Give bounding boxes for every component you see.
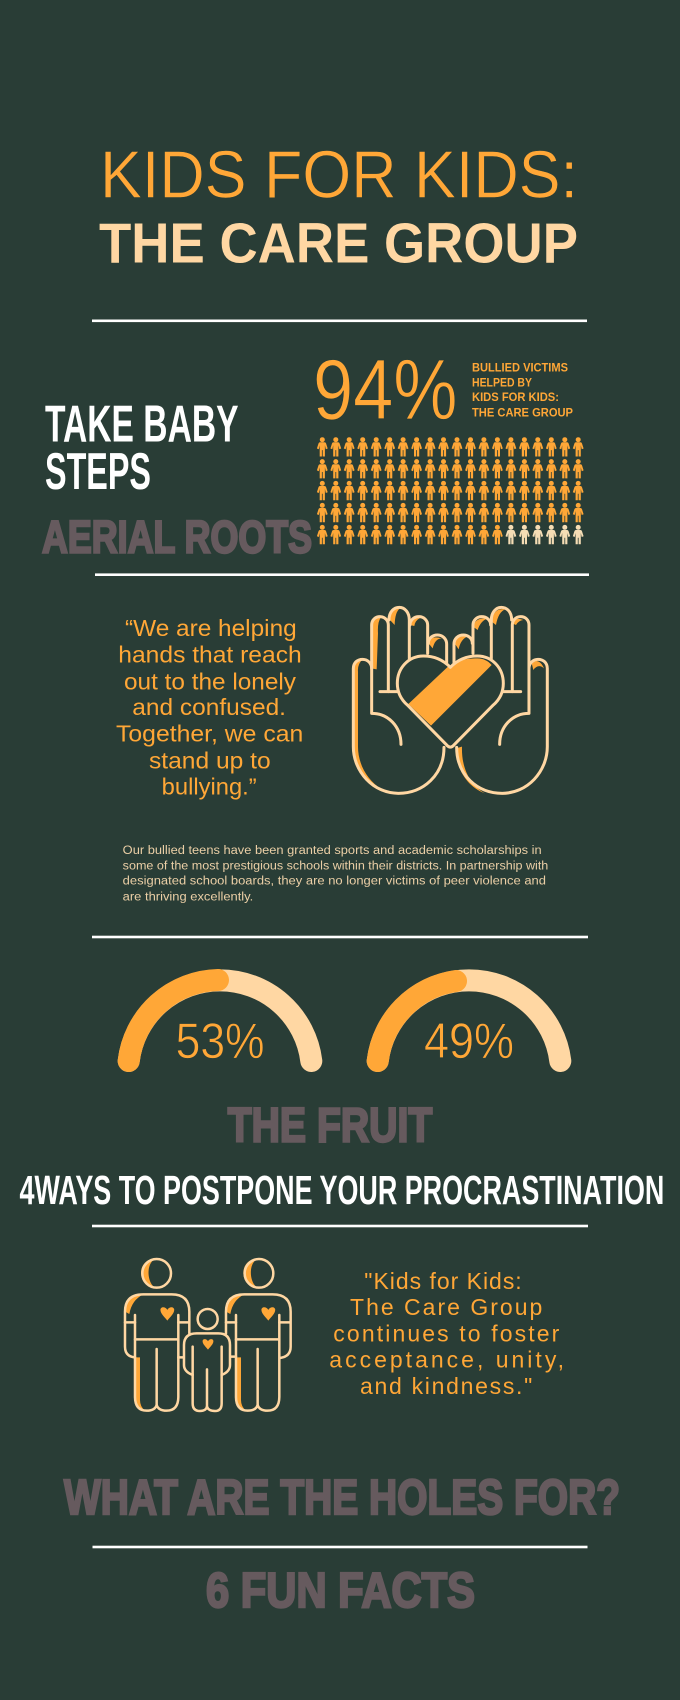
- title: KIDS FOR KIDS:: [100, 138, 578, 212]
- heart: [397, 656, 503, 747]
- quote: helping hands: and confused.: [132, 694, 286, 720]
- orange hand shading: [353, 608, 544, 793]
- title: [99, 138, 578, 276]
- heading: take baby steps: [45, 396, 238, 501]
- orange family shading: [125, 1258, 259, 1411]
- quote: care group continues: [329, 1268, 564, 1399]
- quote: care group continues: The Care Group: [350, 1294, 542, 1320]
- stat: 94 percent: 94%: [313, 343, 458, 438]
- title: THE CARE GROUP: [99, 212, 578, 276]
- text block: scholarships paragraph: some of the most prestigious schools within their districts. In partnership with: [123, 860, 548, 872]
- stat: 94 percent: BULLIED VICTIMS: [472, 363, 568, 375]
- quote: care group continues: "Kids for Kids:: [364, 1268, 522, 1294]
- quote: helping hands: “We are helping: [125, 615, 297, 641]
- heading: take baby steps: TAKE BABY: [45, 396, 238, 454]
- stat: 94 percent: [313, 343, 573, 438]
- text block: scholarships paragraph: Our bullied teens have been granted sports and academic scholarships in: [123, 845, 542, 857]
- family hearts: [160, 1307, 275, 1350]
- gauge: 49 percent: [378, 980, 560, 1069]
- stat: 94 percent: HELPED BY: [472, 378, 532, 390]
- heading: take baby steps: STEPS: [45, 443, 151, 501]
- quote: helping hands: out to the lonely: [124, 668, 297, 694]
- text block: scholarships paragraph: [123, 845, 548, 904]
- quote: care group continues: and kindness.": [360, 1373, 532, 1399]
- quote: helping hands: stand up to: [149, 747, 271, 773]
- child: [184, 1309, 230, 1411]
- icon: hands holding heart: [353, 607, 547, 793]
- quote: helping hands: Together, we can: [116, 721, 303, 747]
- heading: aerial roots: AERIAL ROOTS: [42, 512, 312, 563]
- icon: family: [125, 1258, 291, 1411]
- stat: 94 percent: KIDS FOR KIDS:: [472, 392, 559, 404]
- left hand outline: [353, 607, 447, 793]
- left adult: [125, 1259, 189, 1411]
- quote: helping hands: hands that reach: [118, 642, 302, 668]
- heading: 6 fun facts: 6 FUN FACTS: [206, 1564, 475, 1618]
- gauge: 49 percent: 49%: [424, 1013, 514, 1069]
- text block: scholarships paragraph: designated school boards, they are no longer victims of peer violence and: [123, 875, 546, 887]
- quote: care group continues: continues to foster: [333, 1321, 560, 1347]
- stat: 94 percent: THE CARE GROUP: [472, 408, 573, 420]
- quote: helping hands: [116, 615, 303, 799]
- text block: scholarships paragraph: are thriving excellently.: [123, 892, 253, 904]
- right adult: [226, 1259, 291, 1411]
- gauge: 53 percent: 53%: [176, 1013, 265, 1069]
- quote: helping hands: bullying.”: [162, 773, 257, 799]
- pictogram: 100 people, 94 highlighted: [317, 437, 584, 544]
- right hand outline: [454, 607, 547, 793]
- gauge: 53 percent: [129, 980, 311, 1069]
- quote: care group continues: acceptance, unity,: [329, 1347, 564, 1373]
- heading: the fruit: THE FRUIT: [228, 1100, 432, 1153]
